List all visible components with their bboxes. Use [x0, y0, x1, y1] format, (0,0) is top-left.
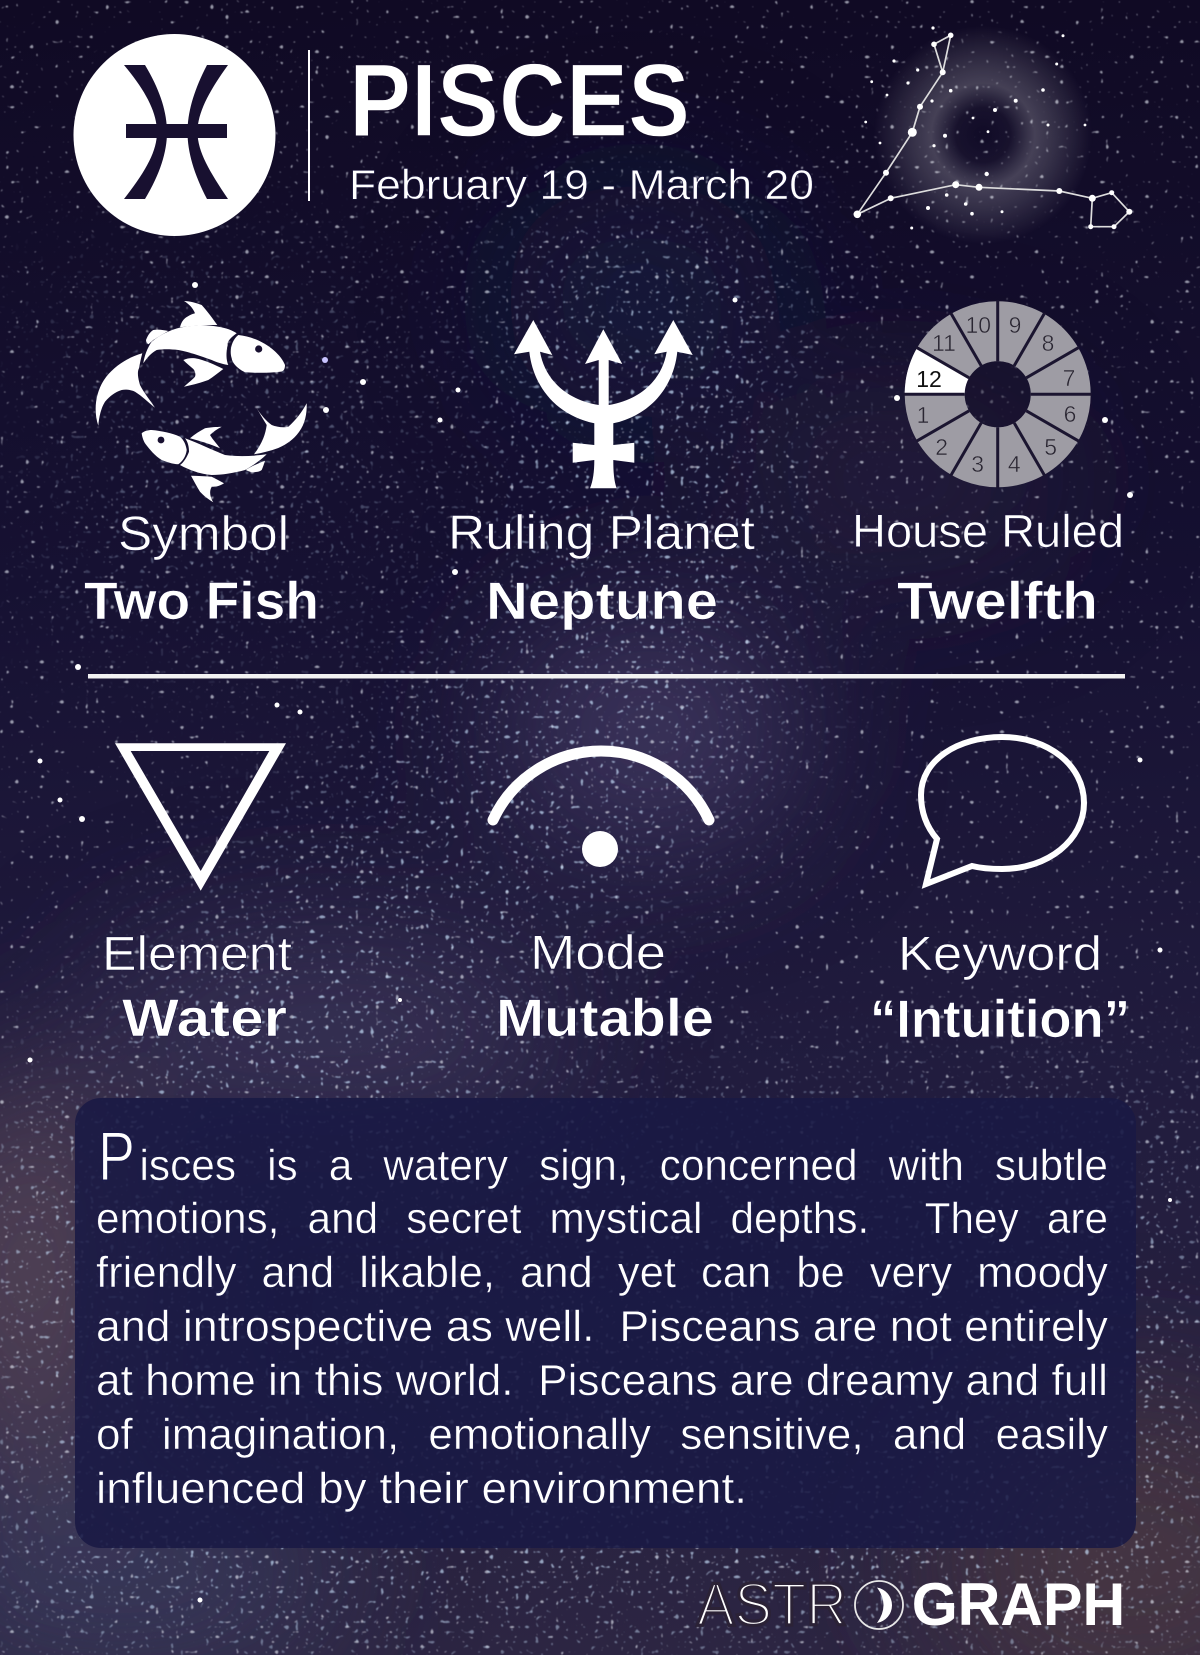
section divider [88, 674, 1125, 678]
icon: house wheel [904, 300, 1092, 488]
icon: house wheel: 1 [917, 402, 929, 428]
icon: speech bubble [921, 737, 1084, 884]
title divider [308, 50, 310, 201]
panel: description: friendly and likable, and yet can be very moody [96, 1248, 1108, 1297]
panel: description: isces is a watery sign, concerned with subtle [140, 1141, 1108, 1190]
label: house ruled [852, 505, 1124, 631]
label: house ruled: Twelfth [897, 572, 1098, 631]
label: mode: Mode [530, 927, 666, 980]
label: ruling planet: Neptune [486, 572, 718, 631]
panel: description: of imagination, emotionally sensitive, and easily [96, 1410, 1108, 1459]
icon: house wheel: 8 [1042, 330, 1054, 356]
panel: description [75, 1098, 1136, 1548]
icon: neptune trident [514, 320, 693, 488]
label: mode: Mutable [496, 989, 714, 1048]
label: mode [496, 927, 714, 1048]
logo: astrograph [697, 1571, 1125, 1638]
icon: house wheel: 10 [966, 312, 991, 338]
icon: water triangle [115, 743, 286, 891]
label: symbol [84, 508, 319, 631]
icon: house wheel: 11 [932, 330, 956, 356]
label: element [102, 928, 292, 1048]
label: keyword: Keyword [898, 928, 1102, 981]
icon: house wheel: 5 [1044, 434, 1057, 460]
icon: house wheel: 3 [971, 451, 984, 477]
icon: house wheel: 6 [1064, 401, 1076, 427]
panel: description: at home in this world. Pisceans are dreamy and full [96, 1356, 1108, 1405]
label: element: Water [122, 989, 287, 1048]
pisces emblem [74, 34, 276, 236]
panel: description: emotions, and secret mystical depths. They are [96, 1194, 1108, 1243]
label: keyword: “Intuition” [870, 990, 1130, 1049]
label: house ruled: House Ruled [852, 505, 1124, 557]
icon: house wheel: 2 [935, 434, 948, 460]
constellation: pisces [854, 25, 1132, 245]
logo: astrograph: GRAPH [912, 1571, 1125, 1638]
label: symbol: Two Fish [84, 572, 319, 631]
panel: description: and introspective as well. Pisceans are not entirely [96, 1302, 1108, 1351]
label: ruling planet: Ruling Planet [448, 507, 755, 560]
label: keyword [870, 928, 1130, 1049]
icon: house wheel: 4 [1008, 451, 1021, 477]
label: ruling planet [448, 507, 755, 631]
label: element: Element [102, 928, 292, 981]
logo: astrograph: ASTR [697, 1571, 847, 1638]
icon: house wheel: 12 [916, 366, 942, 392]
icon: house wheel: 7 [1063, 365, 1075, 391]
label: symbol: Symbol [118, 508, 289, 561]
icon: house wheel: 9 [1009, 312, 1021, 338]
icon: two fish [96, 301, 307, 502]
title: PISCES [349, 43, 690, 159]
date range: February 19 - March 20 [349, 161, 814, 208]
panel: description: P [98, 1117, 135, 1195]
icon: mutable mode [493, 751, 709, 867]
panel: description: influenced by their environment. [96, 1464, 747, 1513]
